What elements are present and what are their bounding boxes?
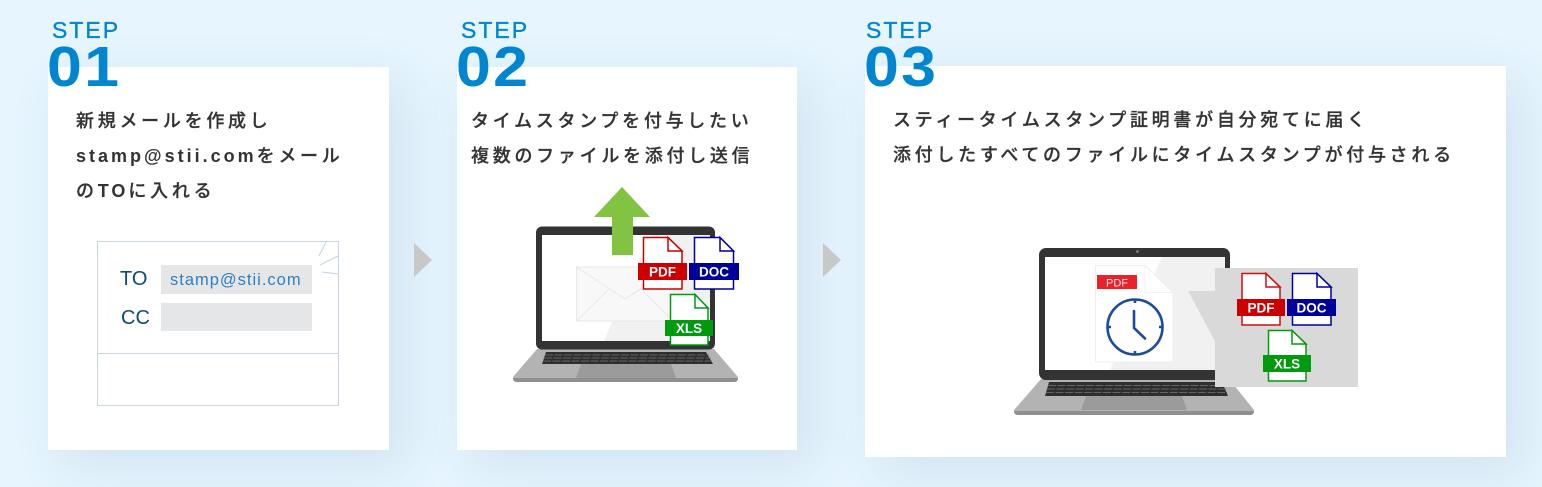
CC field <box>161 303 312 331</box>
text: step 2 instructions <box>471 111 753 166</box>
text: step 2 instructions: 複数のファイルを添付し送信 <box>471 146 753 166</box>
PDF file icon <box>1237 274 1285 325</box>
callout: attached files <box>1188 268 1358 387</box>
text: step 1 instructions: 新規メールを作成し <box>76 111 271 131</box>
text: step 3 instructions <box>893 110 1455 165</box>
text: step 3 instructions: 添付したすべてのファイルにタイムスタンプが付与される <box>893 145 1455 165</box>
timestamped PDF document <box>1096 266 1173 362</box>
arrow: step 2 to step 3 <box>823 243 841 277</box>
XLS file icon: XLS <box>676 321 702 336</box>
text: step 2 instructions: タイムスタンプを付与したい <box>471 111 752 131</box>
XLS file icon <box>665 294 713 345</box>
arrow: step 1 to step 2 <box>414 243 432 277</box>
text: step 3 instructions: スティータイムスタンプ証明書が自分宛てに届く <box>893 110 1369 130</box>
DOC file icon: DOC <box>699 264 729 280</box>
PDF file icon: PDF <box>1248 300 1274 316</box>
heading: step 3 label: STEP <box>866 17 934 43</box>
DOC file icon: DOC <box>1296 300 1327 316</box>
text: step 1 instructions: stamp@stii.comをメール <box>76 146 343 166</box>
heading: step 2 number: 02 <box>456 35 530 99</box>
envelope <box>576 267 674 321</box>
text: step 1 instructions: のTOに入れる <box>76 181 215 201</box>
panel: step 2 card <box>457 67 797 450</box>
heading: step 1 label: STEP <box>52 17 120 43</box>
TO field <box>161 265 312 294</box>
email form illustration <box>98 242 338 406</box>
XLS file icon: XLS <box>1274 356 1300 372</box>
heading: step 2 label: STEP <box>461 17 529 43</box>
heading: step 3 number: 03 <box>864 35 938 99</box>
XLS file icon <box>1263 330 1311 381</box>
laptop illustration: step 2 <box>513 187 739 382</box>
TO field: stamp@stii.com <box>170 271 302 289</box>
DOC file icon <box>1287 274 1336 325</box>
text: step 1 instructions <box>76 111 343 201</box>
timestamped PDF document: PDF <box>1106 278 1128 290</box>
PDF file icon <box>638 238 687 289</box>
laptop illustration: step 3 <box>1014 248 1358 415</box>
CC label: CC <box>121 307 150 329</box>
upload arrow <box>594 187 650 255</box>
panel: step 3 card <box>865 66 1506 457</box>
panel: step 1 card <box>48 67 389 450</box>
PDF file icon: PDF <box>649 264 676 280</box>
TO label: TO <box>120 268 147 290</box>
DOC file icon <box>689 238 739 289</box>
heading: step 1 number: 01 <box>47 35 121 99</box>
clock icon <box>1107 299 1163 355</box>
